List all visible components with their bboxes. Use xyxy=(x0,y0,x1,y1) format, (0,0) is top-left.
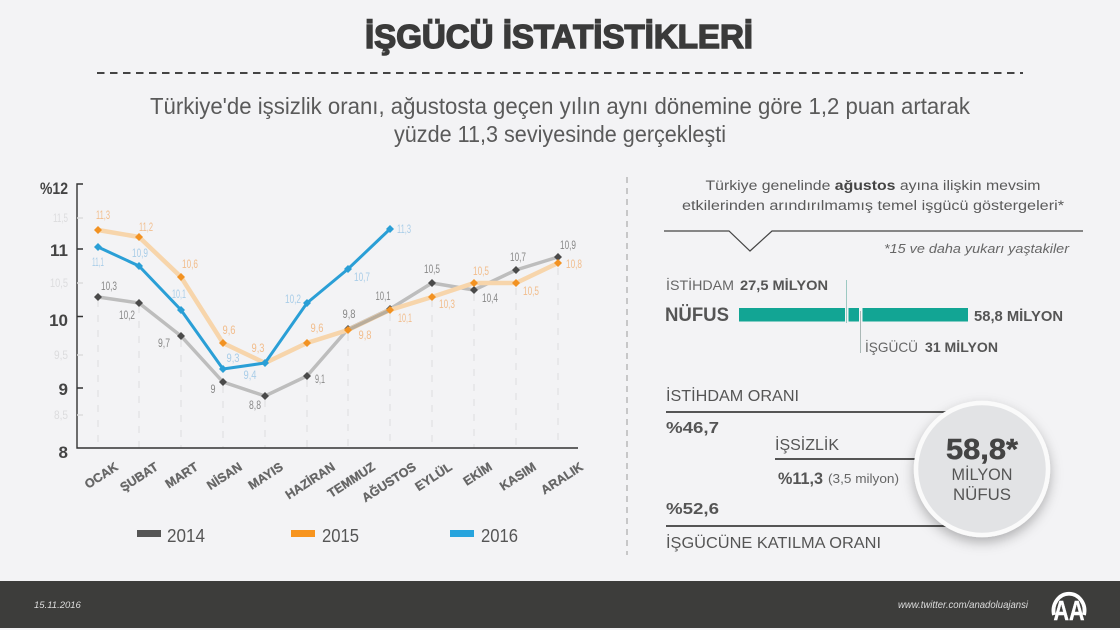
value labels 2016: 9,4 xyxy=(244,368,257,382)
value labels 2014: 8,8 xyxy=(249,398,261,412)
footnote: *15 ve daha yukarı yaştakiler xyxy=(884,241,1070,256)
value labels 2016: 10,9 xyxy=(132,246,148,260)
icon: AA logo: AA xyxy=(1054,595,1084,626)
legend: 2014 xyxy=(167,526,205,546)
value labels 2014: 10,1 xyxy=(376,289,391,303)
month labels: MART xyxy=(163,460,201,491)
right panel heading: etkilerinden arındırılmamış temel işgücü göstergeleri* xyxy=(682,198,1065,213)
rates: %11,3 xyxy=(778,469,823,488)
y axis labels: 9,5 xyxy=(54,348,68,362)
month labels: KASIM xyxy=(497,460,539,493)
series 2016 xyxy=(94,225,394,373)
y axis labels: 8,5 xyxy=(54,408,68,422)
y axis labels: 8 xyxy=(59,443,68,462)
rates: %46,7 xyxy=(666,420,719,437)
value labels 2016: 11,1 xyxy=(92,255,104,269)
value labels 2014: 10,7 xyxy=(510,250,526,264)
value labels 2015: 10,1 xyxy=(398,311,412,325)
value labels 2015: 10,5 xyxy=(523,284,539,298)
month labels: MAYIS xyxy=(246,460,286,492)
legend: 2015 xyxy=(322,526,359,546)
month labels: HAZİRAN xyxy=(282,459,338,502)
value labels 2014: 10,9 xyxy=(560,238,576,252)
value labels 2014: 10,5 xyxy=(424,262,440,276)
value labels 2014: 10,3 xyxy=(101,279,117,293)
value labels 2015: 9,6 xyxy=(222,323,236,337)
month labels: OCAK xyxy=(82,460,121,492)
value labels 2015: 9,8 xyxy=(358,328,372,342)
line chart xyxy=(40,179,586,505)
value labels 2015: 10,5 xyxy=(473,264,489,278)
population bar: 31 MİLYON xyxy=(925,339,998,355)
population circle: MİLYON xyxy=(952,465,1012,484)
value labels 2014: 9,1 xyxy=(315,372,325,386)
value labels 2016: 9,3 xyxy=(226,351,240,365)
axes xyxy=(77,184,578,448)
value labels 2015: 11,2 xyxy=(139,220,153,234)
month labels: EYLÜL xyxy=(412,459,455,494)
y axis labels xyxy=(40,179,68,462)
population bar: İŞGÜCÜ xyxy=(865,338,918,355)
value labels 2015: 9,6 xyxy=(310,321,324,335)
population circle: NÜFUS xyxy=(953,486,1011,504)
rates: İSTİHDAM ORANI xyxy=(666,386,799,405)
rates: %52,6 xyxy=(666,501,719,518)
subtitle xyxy=(150,93,970,147)
population bar: 58,8 MİLYON xyxy=(974,308,1063,325)
series 2015 xyxy=(94,226,562,363)
right panel heading: Türkiye genelinde ağustos ayına ilişkin mevsim xyxy=(706,178,1040,193)
legend xyxy=(137,526,518,546)
value labels 2015: 9,3 xyxy=(252,341,265,355)
footer bar xyxy=(0,581,1120,628)
rates: (3,5 milyon) xyxy=(828,472,899,486)
title: İŞGÜCÜ İSTATİSTİKLERİ xyxy=(365,18,753,55)
footer bar: www.twitter.com/anadoluajansi xyxy=(898,599,1029,611)
value labels 2014: 9,8 xyxy=(342,307,356,321)
y axis labels: 9 xyxy=(59,380,68,399)
value labels 2014: 10,2 xyxy=(119,308,135,322)
rates xyxy=(666,386,951,552)
rates: İŞSİZLİK xyxy=(775,435,839,454)
rates: İŞGÜCÜNE KATILMA ORANI xyxy=(666,533,881,552)
value labels 2014 xyxy=(101,238,576,412)
value labels 2014: 9 xyxy=(210,382,216,396)
value labels 2015: 10,3 xyxy=(439,297,455,311)
month labels: TEMMUZ xyxy=(325,460,378,501)
population bar xyxy=(665,276,1063,355)
value labels 2015: 10,6 xyxy=(182,257,198,271)
value labels 2015 xyxy=(96,208,582,355)
population bar: İSTİHDAM xyxy=(666,276,734,293)
legend: 2016 xyxy=(481,526,518,546)
month labels: NİSAN xyxy=(204,459,245,493)
value labels 2016: 11,3 xyxy=(397,222,411,236)
month labels: ŞUBAT xyxy=(118,460,161,494)
y axis labels: 11 xyxy=(50,241,68,260)
series 2014 xyxy=(94,253,562,400)
value labels 2014: 10,4 xyxy=(482,291,498,305)
value labels 2015: 11,3 xyxy=(96,208,110,222)
month labels: EKİM xyxy=(460,459,495,489)
subtitle: yüzde 11,3 seviyesinde gerçekleşti xyxy=(394,121,726,147)
value labels 2016: 10,1 xyxy=(172,287,186,301)
y axis labels: 10 xyxy=(49,311,68,330)
value labels 2014: 9,7 xyxy=(158,336,170,350)
population circle: 58,8* xyxy=(946,434,1019,466)
footer bar: 15.11.2016 xyxy=(34,600,82,611)
month labels: ARALIK xyxy=(538,460,586,497)
population bar: 27,5 MİLYON xyxy=(740,277,828,293)
value labels 2016 xyxy=(92,222,411,382)
y axis labels: %12 xyxy=(40,179,68,198)
y axis labels: 10,5 xyxy=(50,276,68,290)
population bar: NÜFUS xyxy=(665,305,729,326)
chevron divider xyxy=(664,231,1083,251)
value labels 2016: 10,7 xyxy=(354,270,370,284)
month labels: AĞUSTOS xyxy=(359,459,419,505)
population circle xyxy=(916,403,1048,535)
y axis labels: 11,5 xyxy=(53,211,68,225)
value labels 2016: 10,2 xyxy=(285,292,301,306)
value labels 2015: 10,8 xyxy=(566,257,582,271)
month labels xyxy=(82,459,586,505)
right panel heading xyxy=(682,178,1065,213)
subtitle: Türkiye'de işsizlik oranı, ağustosta geçen yılın aynı dönemine göre 1,2 puan artarak xyxy=(150,93,970,119)
